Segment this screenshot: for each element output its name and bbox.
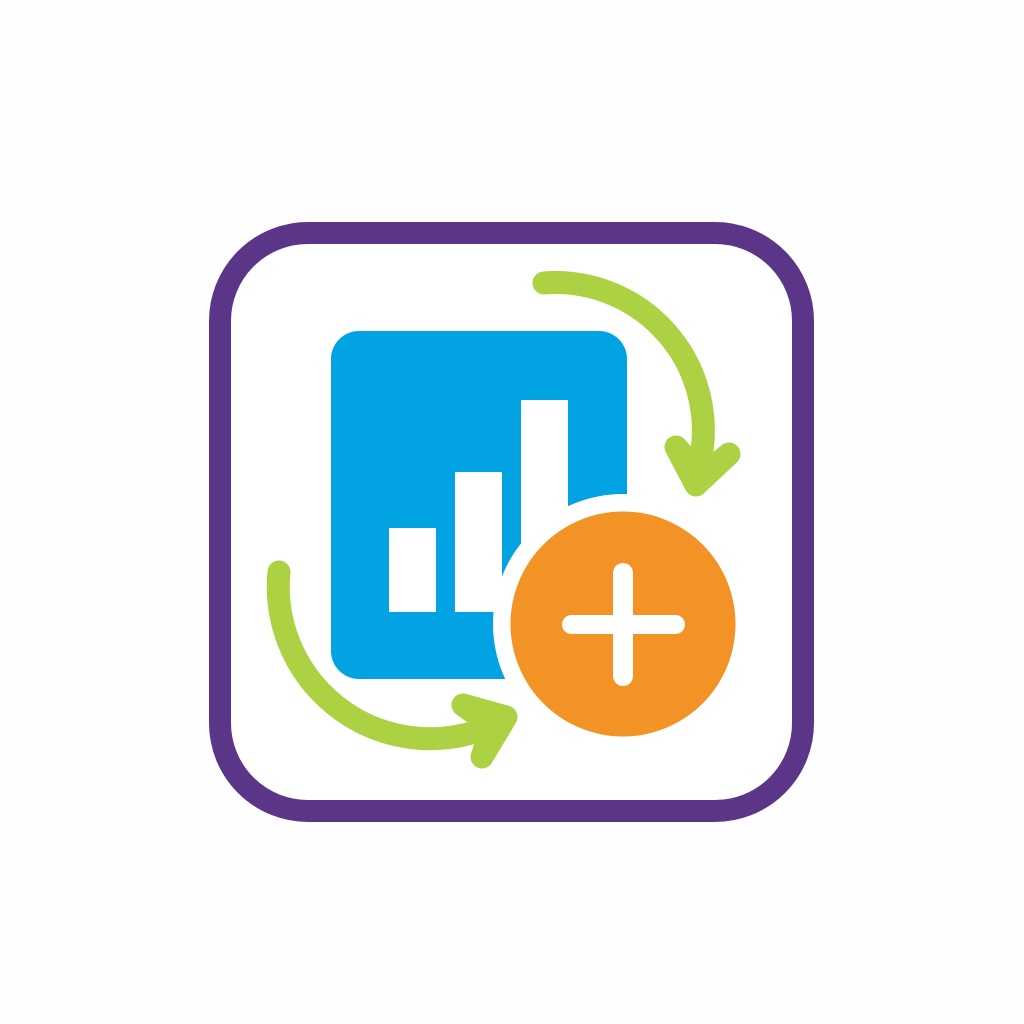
bar chart: [389, 400, 568, 612]
orange plus badge: [493, 494, 753, 754]
rounded square frame: [220, 233, 803, 811]
blue document panel: [331, 331, 627, 679]
arrow: bottom left counter-clockwise: [278, 572, 506, 757]
arrow: top right clockwise: [544, 283, 729, 485]
